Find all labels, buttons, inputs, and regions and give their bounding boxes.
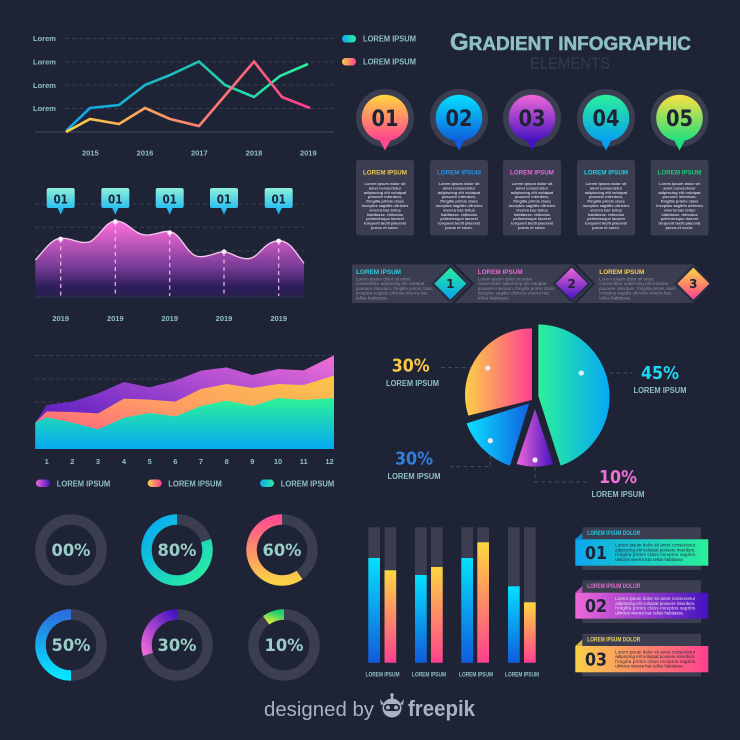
- labels: [386, 356, 687, 499]
- callout badges: [47, 188, 293, 215]
- arrow banner: [352, 264, 712, 303]
- axis labels: lorem: Lorem: [33, 34, 56, 43]
- text cards: [356, 160, 708, 236]
- gauge 50%: [40, 614, 102, 676]
- ribbon list: [575, 527, 708, 676]
- bar tracks: [368, 527, 536, 663]
- banner text 2: posuere interdum, fringilla primis class: [478, 286, 555, 291]
- axis numbers: 10: [274, 457, 282, 466]
- labels: 10%: [599, 468, 637, 488]
- gauge 30%: 30%: [158, 636, 197, 655]
- card 5: Lorem ipsum dolor sit: [659, 181, 701, 186]
- ribbon 02: [575, 580, 708, 623]
- banner text 3: consectetur adipiscing elit volutpat: [599, 281, 669, 286]
- footer: freepik credit: [264, 693, 476, 721]
- purple layer: [35, 355, 334, 449]
- card 2: pellentesque laoreet: [440, 216, 479, 221]
- axis labels: 2019: [270, 314, 287, 323]
- pin 04: [577, 89, 635, 150]
- axis labels: lorem: Lorem: [33, 104, 56, 113]
- card 4: posuere interdum,: [589, 194, 623, 199]
- card 1: habitasse. ridiculus: [367, 212, 403, 217]
- axis labels: 2019: [161, 314, 178, 323]
- card 3: inceptos sagittis ultricies: [509, 203, 555, 208]
- card 4: habitasse. ridiculus: [588, 212, 624, 217]
- ribbon 01: [575, 527, 708, 570]
- orange to pink series: [66, 62, 310, 132]
- card 3: purus et socio.: [518, 225, 546, 230]
- card 4: inceptos sagittis ultricies: [583, 203, 629, 208]
- gauge 60%: [252, 520, 312, 580]
- ribbon 03: adipiscing elit volutpat posuere interdum,: [615, 654, 695, 659]
- axis labels: [52, 314, 287, 323]
- banner text 1: [356, 269, 433, 300]
- banner text 2: inceptos sagittis ultricies viverra hac: [478, 291, 550, 296]
- axis numbers: 7: [199, 457, 203, 466]
- legend: line chart: LOREM IPSUM: [363, 58, 416, 66]
- card 5: [650, 160, 708, 236]
- ribbon 03: 03: [585, 650, 607, 670]
- ribbon 03: Lorem ipsum dolor sit amet consectetur: [615, 649, 696, 654]
- card 4: viverra hac tellus: [590, 207, 622, 212]
- card 5: LOREM IPSUM: [658, 170, 702, 176]
- slice 10%: [517, 409, 553, 467]
- pin 04: 04: [592, 107, 620, 132]
- banner text 3: Lorem ipsum dolor sit amet: [599, 276, 654, 282]
- card 5: viverra hac tellus: [664, 207, 695, 212]
- card 2: fringilla primis class: [440, 199, 478, 204]
- legend: LOREM IPSUM: [168, 479, 222, 488]
- card 2: amet consectetur: [443, 185, 476, 190]
- donut gauges: [40, 520, 314, 676]
- axis labels: years: 2017: [191, 148, 208, 158]
- card 5: habitasse. ridiculus: [661, 212, 698, 217]
- axis labels: 2019: [52, 314, 69, 323]
- card 2: torquent taciti placerat: [438, 221, 481, 226]
- callout badges: 01: [53, 192, 68, 206]
- gauge 10%: 10%: [264, 636, 304, 655]
- axis numbers: 12: [325, 457, 334, 466]
- pin 05: [650, 89, 708, 150]
- gauge 00%: 00%: [52, 541, 91, 560]
- axis labels: lorem: Lorem: [33, 58, 56, 66]
- ribbon 01: fringilla primis class inceptos sagittis: [615, 552, 695, 557]
- card 1: posuere interdum,: [368, 194, 402, 199]
- card 3: Lorem ipsum dolor sit: [512, 181, 553, 186]
- card 4: purus et socio.: [592, 225, 620, 230]
- orange bars: [384, 542, 536, 663]
- bar labels: LOREM IPSUM: [412, 673, 446, 679]
- ribbon 02: 02: [585, 596, 607, 617]
- arrow banner: 1: [446, 277, 454, 291]
- ribbon 01: ultricies viverra hac tellus habitasse.: [615, 557, 684, 562]
- card 5: torquent taciti placerat: [659, 221, 701, 226]
- card 3: LOREM IPSUM: [510, 170, 554, 176]
- axis labels: 2019: [216, 314, 232, 323]
- card 5: fringilla primis class: [661, 199, 698, 204]
- gauge 30%: [146, 614, 208, 676]
- legend: line chart: [342, 34, 416, 66]
- gauge 10%: [254, 614, 314, 676]
- labels: LOREM IPSUM: [634, 386, 687, 395]
- pin 02: [430, 89, 488, 150]
- axis labels: years: 2018: [246, 148, 262, 158]
- pin 02: 02: [446, 107, 472, 132]
- pin 05: 05: [666, 107, 693, 132]
- banner text 1: LOREM IPSUM: [356, 269, 401, 276]
- banner text 1: tellus habitasse.: [356, 295, 388, 300]
- ribbon 01: LOREM IPSUM DOLOR: [587, 531, 641, 537]
- ribbon 01: 01: [585, 543, 607, 564]
- callout badges: 01: [217, 192, 231, 206]
- banner text 1: inceptos sagittis ultricies viverra hac: [356, 291, 429, 296]
- axis numbers: 1: [45, 457, 49, 466]
- pie chart: [386, 324, 687, 499]
- banner text 2: [478, 269, 555, 300]
- banner text 3: LOREM IPSUM: [599, 269, 645, 276]
- bar labels: LOREM IPSUM: [505, 673, 539, 679]
- axis labels: years: [82, 148, 317, 158]
- legend: LOREM IPSUM: [57, 479, 111, 488]
- axis numbers: 5: [148, 457, 152, 466]
- card 1: pellentesque laoreet: [366, 216, 405, 221]
- callout badges: 01: [271, 192, 286, 206]
- card 2: purus et socio.: [445, 225, 473, 230]
- ribbon 02: LOREM IPSUM DOLOR: [587, 584, 641, 590]
- ribbon 01: adipiscing elit volutpat posuere interdum,: [615, 548, 695, 552]
- ribbon 02: ultricies viverra hac tellus habitasse.: [615, 610, 684, 615]
- card 1: inceptos sagittis ultricies: [362, 203, 408, 208]
- ribbon 01: Lorem ipsum dolor sit amet consectetur: [615, 543, 696, 548]
- gauge 80%: [146, 520, 208, 580]
- labels: 45%: [641, 364, 679, 384]
- card 2: viverra hac tellus: [443, 207, 475, 212]
- card 4: pellentesque laoreet: [587, 216, 626, 221]
- axis labels: years: 2015: [82, 148, 99, 158]
- card 1: LOREM IPSUM: [363, 170, 407, 176]
- banner text 2: consectetur adipiscing elit volutpat: [478, 281, 547, 286]
- axis numbers: 6: [173, 457, 177, 466]
- card 3: torquent taciti placerat: [511, 221, 554, 226]
- blue bars: [368, 558, 520, 663]
- ribbon 02: fringilla primis class inceptos sagittis: [615, 606, 695, 610]
- card 4: amet consectetur: [590, 185, 623, 190]
- card 1: [356, 160, 414, 236]
- gauge 60%: 60%: [262, 541, 302, 560]
- axis numbers: 11: [300, 457, 308, 466]
- ribbon 02: Lorem ipsum dolor sit amet consectetur: [615, 596, 696, 601]
- banner shapes: [352, 264, 712, 303]
- gauge 80%: 80%: [158, 541, 197, 560]
- stacked area chart: [35, 355, 335, 488]
- ribbon 03: LOREM IPSUM DOLOR: [587, 638, 641, 644]
- card 2: Lorem ipsum dolor sit: [439, 181, 480, 186]
- axis labels: 2019: [107, 314, 124, 323]
- banner text 2: tellus habitasse.: [478, 295, 510, 300]
- banner text 2: Lorem ipsum dolor sit amet: [478, 276, 533, 282]
- arrow banner: 2: [568, 277, 576, 291]
- card 5: pellentesque laoreet: [661, 216, 699, 221]
- pin 01: 01: [372, 107, 398, 132]
- card 4: fringilla primis class: [587, 199, 625, 204]
- title: GRADIENT INFOGRAPHIC: [450, 29, 691, 56]
- icon: freepik mascot: [380, 693, 404, 718]
- card 3: [503, 160, 561, 236]
- card 2: LOREM IPSUM: [437, 170, 481, 176]
- subtitle: ELEMENTS: [530, 56, 610, 72]
- card 2: [430, 160, 488, 236]
- card 3: fringilla primis class: [513, 199, 551, 204]
- title: [450, 29, 691, 72]
- axis labels: years: 2016: [137, 148, 153, 158]
- banner text 1: posuere interdum, fringilla primis class: [356, 286, 433, 291]
- labels: 30%: [395, 450, 433, 470]
- footer: freepik credit: freepik: [408, 696, 476, 721]
- banner text 1: Lorem ipsum dolor sit amet: [356, 276, 411, 282]
- purple area: [35, 221, 304, 297]
- card 1: Lorem ipsum dolor sit: [365, 181, 406, 186]
- callout badges: 01: [108, 192, 123, 206]
- labels: LOREM IPSUM: [388, 472, 441, 481]
- card 4: adipiscing elit volutpat: [585, 190, 628, 195]
- card 1: adipiscing elit volutpat: [364, 190, 407, 195]
- card 5: posuere interdum,: [663, 194, 696, 199]
- card 1: fringilla primis class: [366, 199, 404, 204]
- slice 30% blue: [467, 403, 529, 466]
- card 1: viverra hac tellus: [369, 207, 401, 212]
- card 3: viverra hac tellus: [516, 207, 548, 212]
- pin 03: 03: [518, 107, 546, 132]
- card 2: habitasse. ridiculus: [441, 212, 477, 217]
- ribbon 03: ultricies viverra hac tellus habitasse.: [615, 664, 684, 669]
- gauge 00%: [40, 520, 102, 580]
- green layer: [35, 398, 334, 449]
- card 1: purus et socio.: [371, 225, 399, 230]
- legend: [36, 479, 335, 488]
- ribbon 03: fringilla primis class inceptos sagittis: [615, 659, 695, 664]
- pin 03: [503, 89, 561, 150]
- banner text 1: consectetur adipiscing elit volutpat: [356, 281, 425, 286]
- labels: LOREM IPSUM: [592, 490, 645, 499]
- card 2: posuere interdum,: [442, 194, 476, 199]
- callout badges: 01: [162, 192, 177, 206]
- axis numbers: 9: [250, 457, 254, 466]
- card 5: inceptos sagittis ultricies: [656, 203, 703, 208]
- bar labels: LOREM IPSUM: [459, 673, 493, 679]
- legend: LOREM IPSUM: [281, 479, 335, 488]
- legend: line chart: LOREM IPSUM: [363, 34, 416, 44]
- ribbon 03: [575, 634, 708, 676]
- gauge 50%: 50%: [52, 636, 91, 655]
- slice 45%: [538, 324, 610, 466]
- axis numbers: 4: [122, 457, 127, 466]
- pin 01: [356, 89, 414, 150]
- line chart: [33, 34, 334, 158]
- axis numbers: 3: [96, 457, 100, 466]
- footer: freepik credit: designed by: [264, 699, 374, 721]
- card 3: amet consectetur: [516, 185, 549, 190]
- card 4: torquent taciti placerat: [585, 221, 628, 226]
- card 3: posuere interdum,: [515, 194, 549, 199]
- numbered pins: [356, 89, 708, 150]
- arrow banner: 3: [689, 277, 697, 291]
- card 3: adipiscing elit volutpat: [511, 190, 554, 195]
- banner text 3: posuere interdum, fringilla primis class: [599, 286, 677, 291]
- ribbon 02: adipiscing elit volutpat posuere interdum,: [615, 601, 695, 606]
- bar labels: [366, 673, 539, 679]
- card 5: purus et socio.: [666, 225, 693, 230]
- area chart with callouts: [35, 188, 304, 323]
- slice 30% yellow: [465, 328, 532, 416]
- card 5: amet consectetur: [663, 185, 696, 190]
- card 5: adipiscing elit volutpat: [658, 190, 701, 195]
- axis numbers: 8: [225, 457, 229, 466]
- banner text 2: LOREM IPSUM: [478, 269, 523, 276]
- bar labels: LOREM IPSUM: [366, 673, 400, 679]
- card 3: pellentesque laoreet: [513, 216, 552, 221]
- card 1: amet consectetur: [369, 185, 402, 190]
- card 4: LOREM IPSUM: [584, 170, 628, 176]
- axis labels: lorem: [33, 34, 56, 113]
- labels: 30%: [392, 356, 430, 376]
- banner text 3: inceptos sagittis ultricies viverra hac: [599, 291, 672, 296]
- card 3: habitasse. ridiculus: [514, 212, 550, 217]
- card 4: [577, 160, 635, 236]
- card 2: inceptos sagittis ultricies: [436, 203, 482, 208]
- card 1: torquent taciti placerat: [364, 221, 407, 226]
- card 2: adipiscing elit volutpat: [438, 190, 481, 195]
- axis numbers: [45, 457, 334, 466]
- labels: LOREM IPSUM: [386, 379, 439, 388]
- card 4: Lorem ipsum dolor sit: [586, 181, 627, 186]
- axis numbers: 2: [70, 457, 74, 466]
- axis labels: years: 2019: [300, 148, 317, 158]
- banner text 3: tellus habitasse.: [599, 295, 632, 300]
- orange layer: [35, 376, 334, 449]
- axis labels: lorem: Lorem: [33, 81, 56, 90]
- bar chart: [366, 527, 539, 679]
- banner text 3: [599, 269, 677, 300]
- blue to green series: [66, 62, 308, 131]
